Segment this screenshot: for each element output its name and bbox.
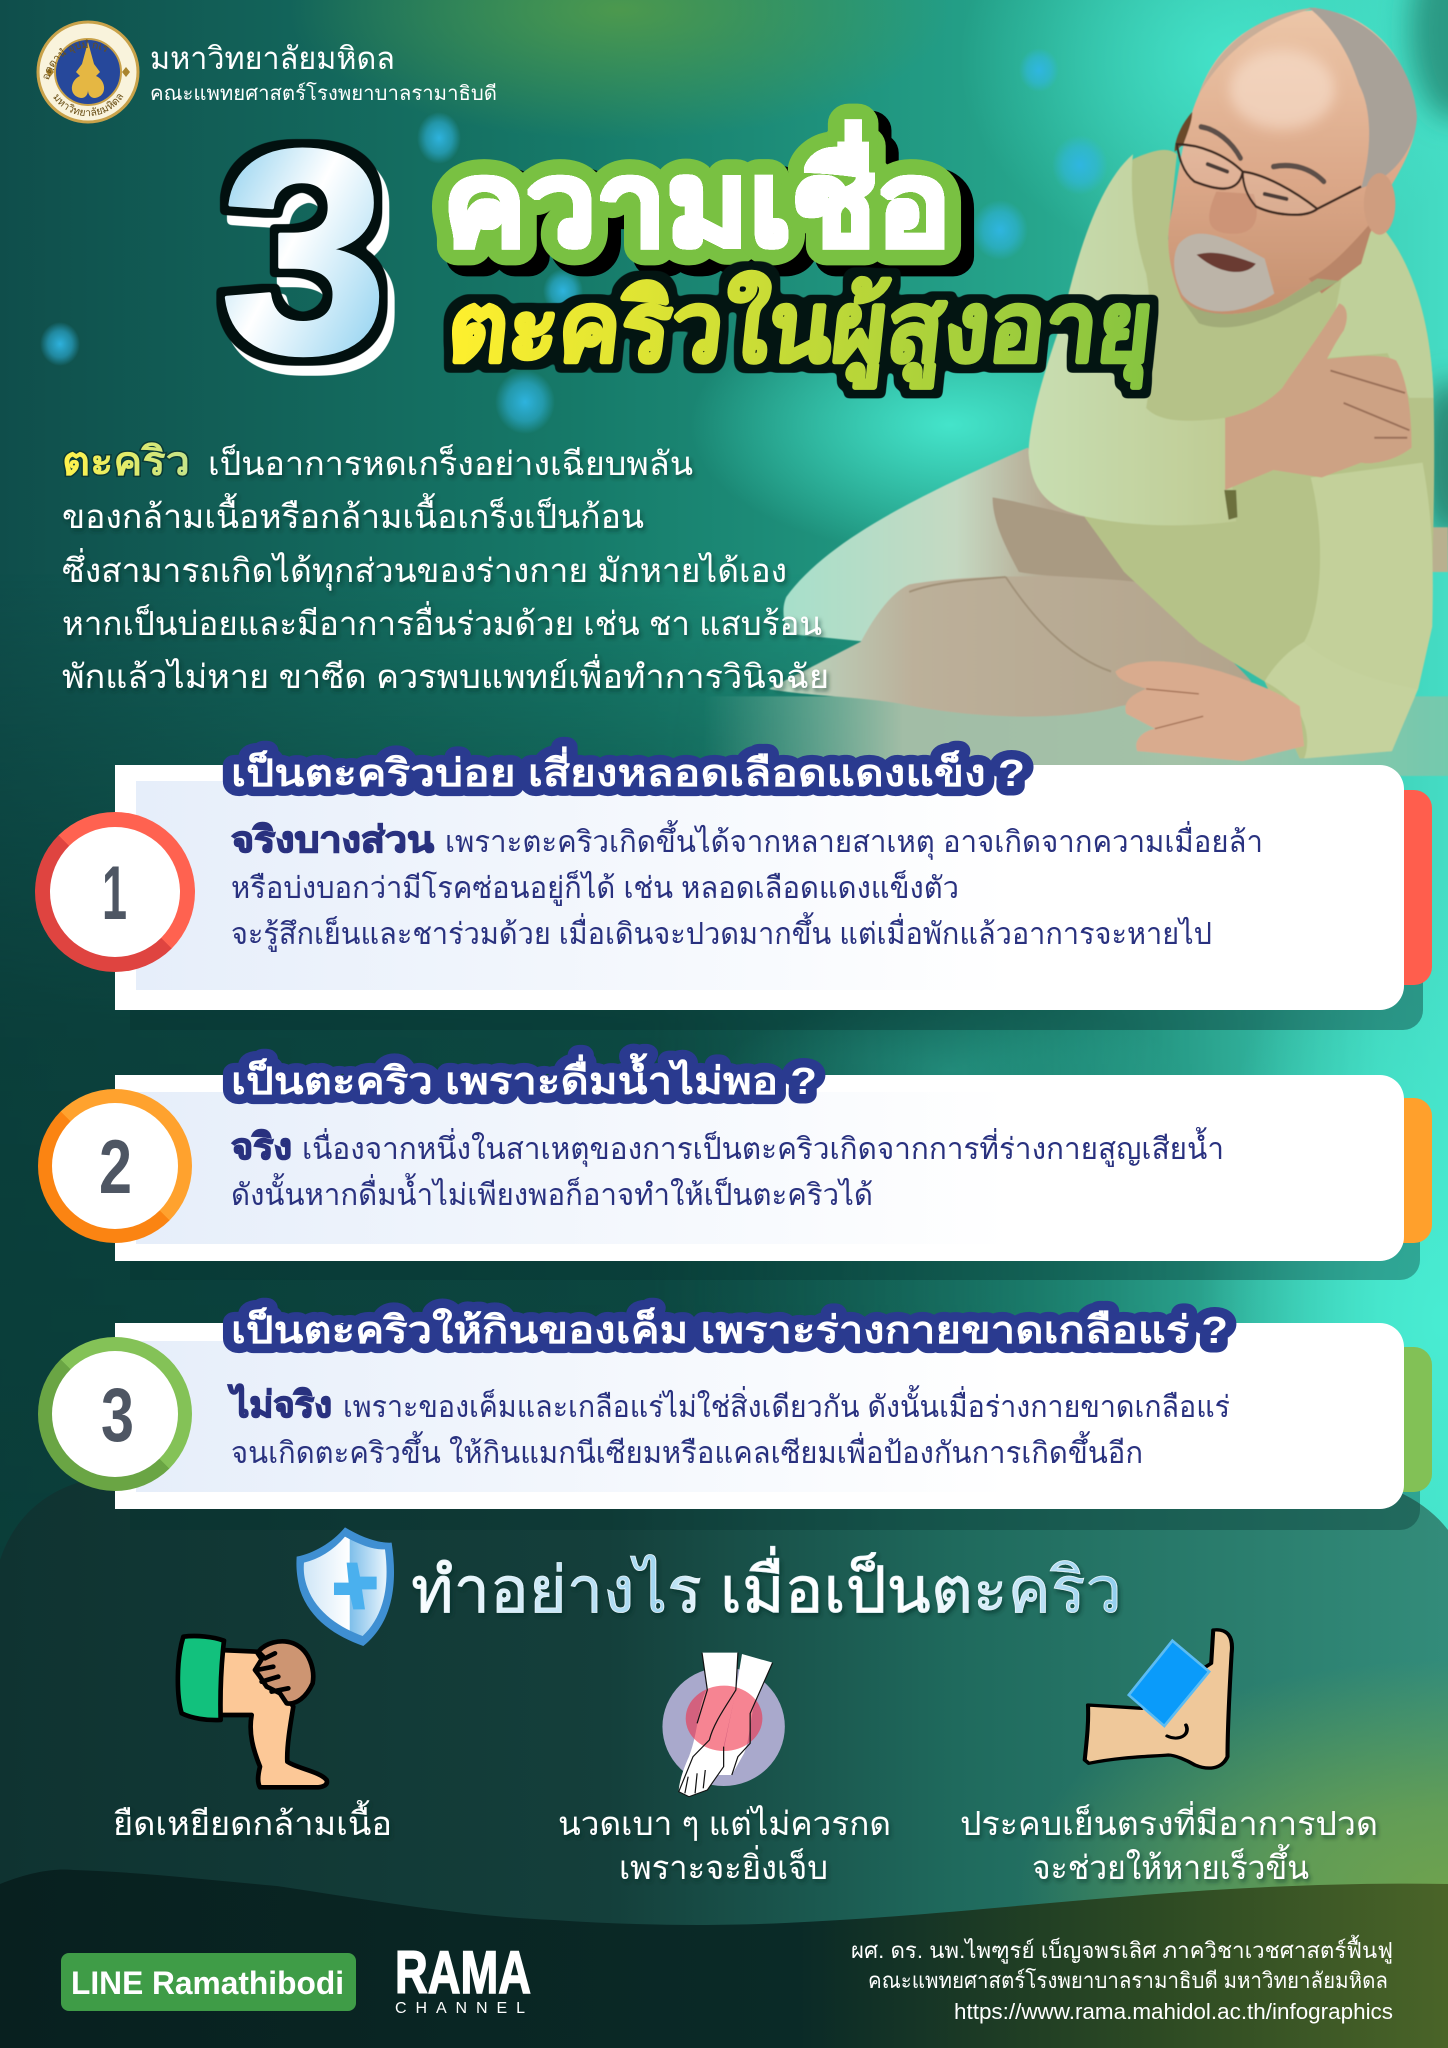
card 1 inner tint (136, 781, 1386, 990)
heading: university name (150, 41, 497, 105)
captions: what to do steps: ประคบเย็นตรงที่มีอาการปวด (960, 1801, 1378, 1842)
captions: what to do steps: นวดเบา ๆ แต่ไม่ควรกด (558, 1805, 891, 1842)
icon: stretching the leg (178, 1636, 327, 1787)
intro paragraph: หากเป็นบ่อยและมีอาการอื่นร่วมด้วย เช่น ชา แสบร้อน (62, 601, 822, 642)
panel: belief 3 (38, 1307, 1432, 1530)
badge: LINE Ramathibodi: LINE Ramathibodi (71, 1965, 344, 2001)
card 1 shadow and tab (130, 790, 1432, 1030)
logo: Mahidol University seal: มหาวิทยาลัยมหิดล (54, 94, 124, 116)
card 3 heading: เป็นตะคริวให้กินของเค็ม เพราะร่างกายขาดเกลือแร่ ? (231, 1307, 1228, 1352)
heading: university name: คณะแพทยศาสตร์โรงพยาบาลรามาธิบดี (150, 82, 497, 105)
card 1 text: จริงบางส่วน (231, 819, 434, 860)
panel: what to do, dark background (0, 1474, 1448, 2048)
photo: older man holding his shoulder (703, 7, 1448, 776)
logo: Mahidol University seal: อตฺตานํ อุปมํ กเร (44, 40, 108, 80)
icon: shield with cross (296, 1527, 394, 1646)
credits: ผศ. ดร. นพ.ไพฑูรย์ เบ็ญจพรเลิศ ภาควิชาเวชศาสตร์ฟื้นฟู (851, 1935, 1393, 1964)
card 3 text: เพราะของเค็มและเกลือแร่ไม่ใช่สิ่งเดียวกัน ดังนั้นเมื่อร่างกายขาดเกลือแร่ (343, 1385, 1230, 1424)
captions: what to do steps: จะช่วยให้หายเร็วขึ้น (1032, 1844, 1309, 1886)
card 1 body (115, 765, 1404, 1010)
background bokeh lights (40, 48, 1108, 434)
card 1 heading: เป็นตะคริวบ่อย เสี่ยงหลอดเลือดแดงแข็ง ? (231, 746, 1025, 795)
card 3 number badge (38, 1337, 192, 1491)
card 3 shadow and tab (130, 1347, 1432, 1530)
footer wave (0, 1870, 1448, 2048)
heading: what to do: ทำอย่างไร เมื่อเป็นตะคริว (411, 1546, 1122, 1626)
card 1 number badge (35, 812, 195, 972)
card 1 text: เพราะตะคริวเกิดขึ้นได้จากหลายสาเหตุ อาจเกิดจากความเมื่อยล้า (445, 820, 1263, 861)
logo: Mahidol University seal (36, 20, 140, 124)
credits (851, 1935, 1393, 2024)
logo: RAMA Channel: RAMA (395, 1939, 531, 2006)
panel: belief 1 (35, 746, 1432, 1030)
intro paragraph: ตะคริว (62, 440, 190, 484)
title line 1: ความเชื่อ (443, 122, 951, 271)
title numeral 3: 3 (220, 90, 388, 414)
card 3 text (227, 1383, 1230, 1470)
card 2 text (231, 1126, 1224, 1212)
card 1 text (231, 819, 1263, 952)
card 2 body (115, 1075, 1404, 1261)
intro paragraph: เป็นอาการหดเกร็งอย่างเฉียบพลัน (208, 444, 693, 482)
card 3 body (115, 1323, 1404, 1509)
heading: university name: มหาวิทยาลัยมหิดล (150, 41, 395, 76)
card 2 number badge (38, 1089, 192, 1243)
badge: LINE Ramathibodi (61, 1953, 356, 2011)
icon: massage on foot (662, 1653, 785, 1797)
card 2 heading: เป็นตะคริว เพราะดื่มน้ำไม่พอ ? (231, 1053, 817, 1103)
logo: RAMA Channel: CHANNEL (395, 2000, 531, 2017)
panel: belief 2 (38, 1053, 1432, 1280)
card 3 text: จนเกิดตะคริวขึ้น ให้กินแมกนีเซียมหรือแคลเซียมเพื่อป้องกันการเกิดขึ้นอีก (231, 1431, 1143, 1470)
card 2 text: เนื่องจากหนึ่งในสาเหตุของการเป็นตะคริวเกิดจากการที่ร่างกายสูญเสียน้ำ (302, 1127, 1224, 1168)
card 2 inner tint (136, 1092, 1386, 1244)
card 3 number badge: 3 (101, 1373, 134, 1458)
card 3 text: ไม่จริง (227, 1383, 332, 1425)
intro paragraph: ของกล้ามเนื้อหรือกล้ามเนื้อเกร็งเป็นก้อน (62, 493, 644, 535)
card 2 number badge: 2 (99, 1125, 132, 1210)
card 1 number badge: 1 (102, 851, 127, 936)
card 1 text: หรือบ่งบอกว่ามีโรคซ่อนอยู่ก็ได้ เช่น หลอดเลือดแดงแข็งตัว (231, 869, 959, 906)
card 2 text: จริง (231, 1126, 292, 1167)
intro paragraph: ซึ่งสามารถเกิดได้ทุกส่วนของร่างกาย มักหายได้เอง (62, 548, 787, 591)
captions: what to do steps: ยืดเหยียดกล้ามเนื้อ (113, 1800, 392, 1842)
captions: what to do steps: เพราะจะยิ่งเจ็บ (619, 1845, 828, 1886)
captions: what to do steps (113, 1800, 1378, 1886)
intro paragraph: พักแล้วไม่หาย ขาซีด ควรพบแพทย์เพื่อทำการวินิจฉัย (62, 654, 829, 695)
credits: คณะแพทยศาสตร์โรงพยาบาลรามาธิบดี มหาวิทยาลัยมหิดล (868, 1968, 1388, 1993)
intro paragraph (62, 440, 829, 695)
credits: https://www.rama.mahidol.ac.th/infographics (954, 1999, 1393, 2024)
card 1 text: จะรู้สึกเย็นและชาร่วมด้วย เมื่อเดินจะปวดมากขึ้น แต่เมื่อพักแล้วอาการจะหายไป (231, 912, 1212, 952)
card 3 inner tint (136, 1341, 1386, 1492)
card 2 text: ดังนั้นหากดื่มน้ำไม่เพียงพอก็อาจทำให้เป็นตะคริวได้ (231, 1173, 873, 1212)
card 2 shadow and tab (130, 1098, 1432, 1280)
icon: cold compress on ankle (1085, 1630, 1232, 1768)
background (0, 0, 1448, 1559)
logo: RAMA Channel (395, 1939, 531, 2017)
title line 2: ตะคริวในผู้สูงอายุ (442, 271, 1158, 389)
